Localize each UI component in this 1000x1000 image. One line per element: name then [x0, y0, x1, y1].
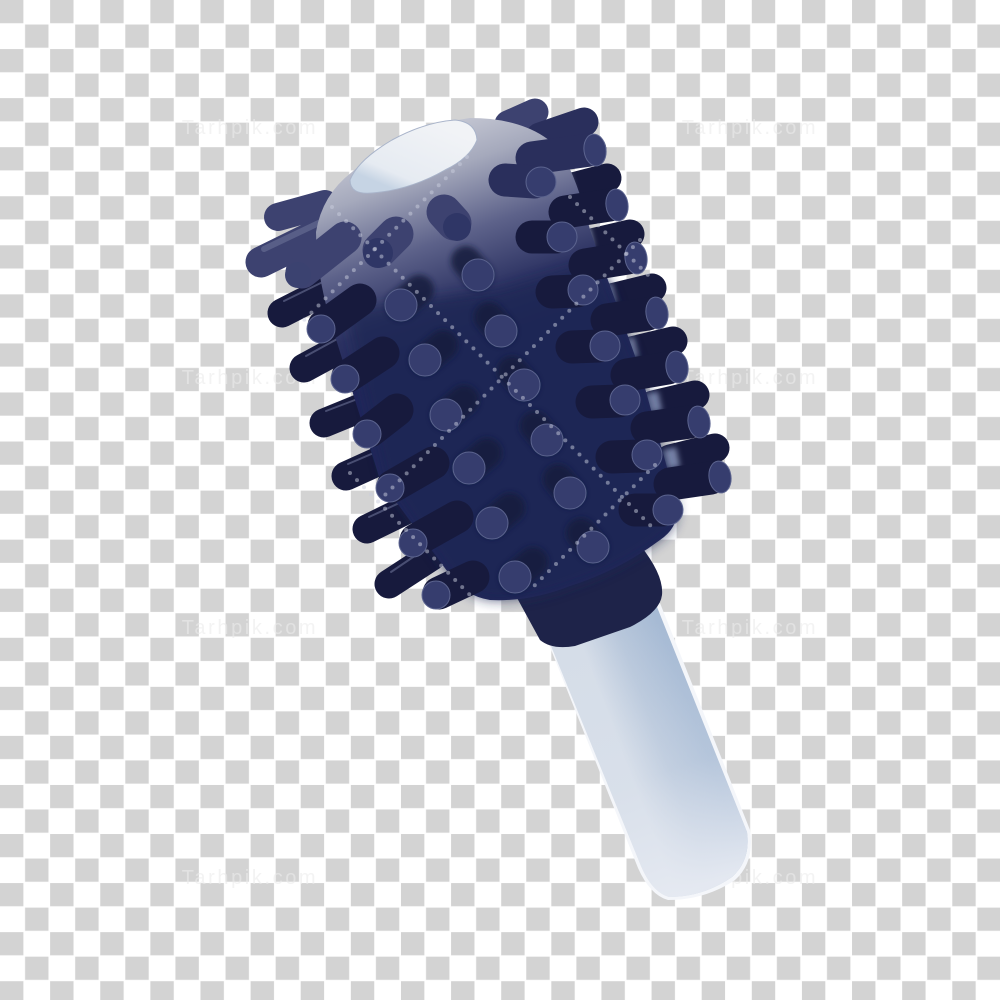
watermarks: Tarhpik.com	[682, 867, 818, 889]
watermarks: Tarhpik.com	[682, 117, 818, 139]
front bristle stubs	[401, 261, 593, 577]
brush body	[316, 118, 677, 600]
left inner capped bristles	[285, 238, 473, 609]
watermarks: Tarhpik.com	[682, 617, 818, 639]
collar	[516, 545, 662, 647]
front caps column B	[462, 259, 609, 563]
watermarks: Tarhpik.com	[182, 867, 318, 889]
dotted watermark lines	[300, 157, 655, 595]
back bristle bases	[558, 183, 678, 460]
watermarks: Tarhpik.com	[682, 367, 818, 389]
watermarks: Tarhpik.com	[182, 367, 318, 389]
top front bristles	[363, 212, 471, 268]
front caps column A	[385, 289, 531, 593]
lower body shade	[345, 260, 677, 600]
right inner capped bristles	[505, 167, 683, 525]
left outer bristles	[261, 204, 432, 584]
handle	[548, 603, 751, 900]
right outer capped bristles	[532, 133, 733, 494]
watermarks: Tarhpik.com	[182, 617, 318, 639]
highlight cap	[350, 120, 477, 193]
watermarks: Tarhpik.com	[182, 117, 318, 139]
watermarks	[182, 117, 818, 889]
back bristles right	[508, 112, 715, 459]
